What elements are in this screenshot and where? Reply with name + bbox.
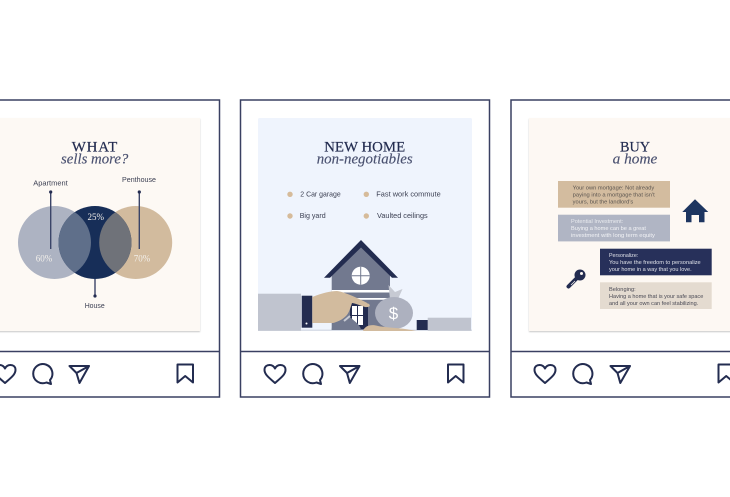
panel: buy a home post: [511, 100, 730, 397]
box: personalize: [600, 249, 712, 275]
leader line: penthouse: [138, 192, 140, 249]
item: 2 car garage: 2 Car garage: [300, 190, 341, 199]
icon: key: [568, 270, 586, 286]
box: personalize: your home in a way that you love.: [609, 267, 692, 273]
money bag: [375, 297, 413, 329]
icon: house: [682, 199, 708, 222]
bullet: [364, 192, 369, 197]
card: what sells more: [0, 118, 200, 331]
icon: send: [610, 366, 630, 383]
circle: apartment: [18, 206, 91, 279]
door: [350, 303, 368, 329]
label: apartment: Apartment: [33, 178, 68, 188]
post frame middle: [240, 100, 490, 397]
icon: comment: [33, 364, 52, 384]
box: belonging: [600, 282, 712, 309]
house bands: [332, 290, 390, 300]
heading: what sells more: sells more?: [61, 152, 129, 168]
illustration: hand passing keys with house and money: [258, 240, 472, 331]
heading: new home non-negotiables: NEW HOME: [324, 140, 405, 156]
leader line: house: [94, 279, 96, 296]
ground line: [258, 330, 472, 331]
item: fast work commute: Fast work commute: [376, 190, 441, 199]
house body: [332, 246, 390, 330]
heading: what sells more: [61, 140, 129, 168]
key: [344, 316, 350, 321]
bullet: [364, 213, 369, 219]
leader dot: penthouse: [138, 190, 141, 194]
panel: what sells more post: [0, 100, 220, 397]
circle: penthouse: [99, 206, 172, 279]
heading: buy a home: a home: [613, 152, 658, 168]
leader dot: apartment: [49, 190, 52, 194]
venn chart: [18, 206, 172, 279]
heading: new home non-negotiables: non-negotiables: [317, 152, 413, 168]
value 70%: 70%: [134, 254, 151, 264]
box: potential investment: Potential Investment:: [571, 219, 624, 225]
overlap: apartment and house: [58, 212, 91, 273]
icon: bookmark: [718, 364, 730, 382]
dollar sign: $: [389, 304, 399, 323]
box: belonging: Belonging:: [609, 287, 636, 293]
post frame right: [511, 100, 730, 397]
label: house: House: [85, 301, 105, 310]
bullet: [287, 192, 293, 197]
hand: [312, 291, 370, 323]
heading: buy a home: BUY: [620, 140, 650, 156]
heading: new home non-negotiables: [317, 140, 413, 168]
card: buy a home: [529, 118, 730, 331]
value 25%: 25%: [87, 212, 104, 222]
heading: what sells more: WHAT: [72, 140, 117, 156]
heading: buy a home: [613, 140, 658, 168]
round window: [352, 267, 370, 285]
circle: house: [58, 206, 132, 279]
overlap: house and penthouse: [99, 212, 132, 273]
card: new home: [258, 118, 472, 331]
box: your own mortgage: [558, 181, 670, 208]
right cuff: [417, 320, 428, 330]
box: personalize: Personalize:: [609, 253, 639, 259]
icon: comment: [303, 364, 322, 384]
box: belonging: and all your own can feel stabilizing.: [609, 301, 699, 307]
icon: send: [70, 366, 89, 383]
cuff button: [306, 322, 308, 324]
icon: heart: [0, 365, 16, 383]
money bag tie: [388, 285, 402, 299]
roof: [324, 240, 398, 278]
box: belonging: Having a home that is your safe space: [609, 294, 703, 300]
box: potential investment: investment with long term equity: [571, 233, 655, 239]
icon: bookmark: [448, 364, 464, 382]
icon: bookmark: [178, 364, 193, 382]
left sleeve: [258, 294, 301, 331]
box: potential investment: Buying a home can be a great: [571, 226, 646, 232]
item: vaulted ceilings: Vaulted ceilings: [377, 211, 428, 220]
leader line: apartment: [50, 192, 52, 249]
right sleeve: [428, 318, 471, 331]
left cuff: [302, 296, 312, 328]
box: potential investment: [558, 215, 670, 241]
receiving hand: [363, 325, 416, 331]
label: penthouse: Penthouse: [122, 175, 156, 184]
box: your own mortgage: yours, but the landlord's: [573, 200, 634, 206]
icon: comment: [573, 364, 592, 384]
list: non-negotiables: [287, 190, 441, 220]
box: your own mortgage: paying into a mortgage that isn't: [573, 192, 655, 198]
icon: send: [340, 366, 360, 383]
panel: new home post: [240, 100, 490, 397]
item: big yard: Big yard: [300, 211, 326, 220]
small bag on the left: [332, 314, 361, 330]
box: your own mortgage: Your own mortgage: Not already: [573, 186, 654, 192]
icon: heart: [534, 365, 556, 383]
post frame left: [0, 100, 220, 397]
leader dot: house: [93, 294, 97, 298]
icon: heart: [264, 365, 286, 383]
value 60%: 60%: [36, 254, 53, 264]
bullet: [287, 213, 293, 219]
box: personalize: You have the freedom to personalize: [609, 260, 701, 266]
